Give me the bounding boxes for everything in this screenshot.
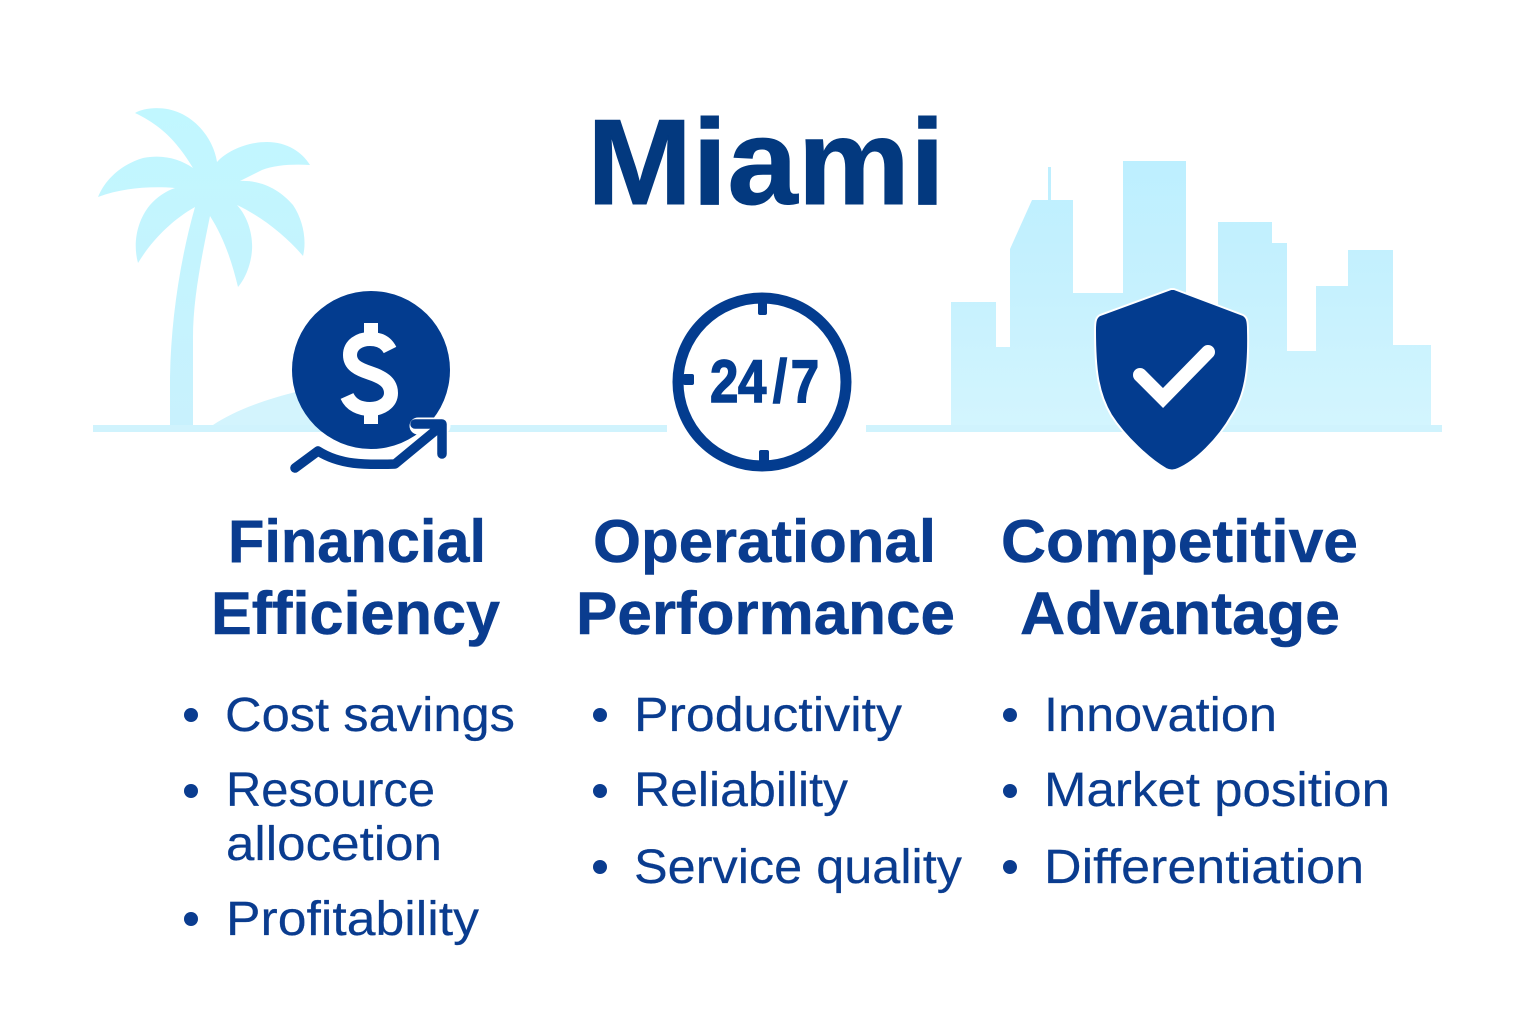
icon: shield with check [1095, 289, 1248, 470]
list: competitive advantage: Differentiation [1044, 841, 1364, 894]
heading: financial efficiency [211, 508, 501, 647]
icon: dollar coin with growth arrow [292, 291, 450, 468]
list: operational performance: Service quality [634, 841, 962, 894]
skyline illustration [951, 161, 1431, 425]
panel: financial efficiency [184, 508, 515, 946]
heading: operational performance [576, 508, 955, 647]
list: financial efficiency: Resource [226, 764, 435, 817]
palm tree illustration [98, 108, 330, 425]
heading: operational performance: Performance [576, 580, 955, 647]
heading: financial efficiency: Financial [228, 508, 486, 575]
heading: financial efficiency: Efficiency [211, 580, 501, 647]
panel: operational performance [576, 508, 962, 894]
list: financial efficiency [184, 689, 515, 946]
icon: 24/7 clock [678, 298, 846, 466]
heading: competitive advantage: Advantage [1020, 580, 1340, 647]
icon: 24/7 clock: 24/7 [710, 348, 819, 415]
list: competitive advantage: Market position [1044, 764, 1390, 817]
title: Miami [587, 94, 945, 230]
heading: operational performance: Operational [593, 508, 936, 575]
heading: competitive advantage: Competitive [1001, 508, 1358, 575]
panel: competitive advantage [1001, 508, 1390, 894]
list: operational performance: Productivity [634, 689, 902, 742]
ground line [93, 425, 1442, 432]
list: financial efficiency: allocetion [226, 818, 442, 871]
list: competitive advantage [1003, 689, 1390, 894]
list: competitive advantage: Innovation [1044, 689, 1277, 742]
list: financial efficiency: Cost savings [225, 689, 515, 742]
list: operational performance [593, 689, 962, 894]
list: operational performance: Reliability [634, 764, 848, 817]
list: financial efficiency: Profitability [226, 893, 479, 946]
heading: competitive advantage [1001, 508, 1358, 647]
